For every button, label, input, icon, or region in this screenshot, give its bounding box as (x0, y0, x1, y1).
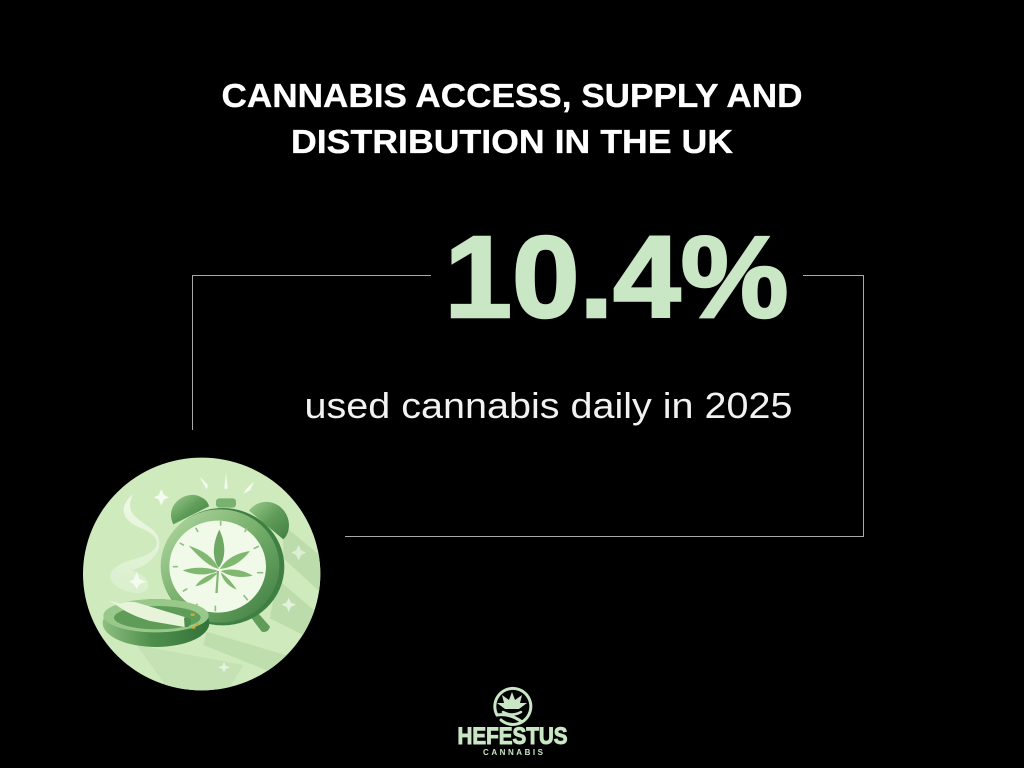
ashtray (103, 599, 209, 647)
shadow rays (137, 525, 323, 692)
sparkles (129, 472, 306, 673)
title: CANNABIS ACCESS, SUPPLY AND (222, 77, 802, 114)
clock ticks (173, 522, 263, 611)
frame around statistic (192, 276, 864, 536)
illustration: alarm clock and ashtray (83, 458, 323, 692)
clock face (169, 521, 266, 613)
top knob (216, 498, 236, 508)
ember (191, 613, 199, 629)
clock body (161, 508, 284, 625)
logo wordmark: HEFESTUS (458, 723, 568, 750)
smoke (110, 494, 159, 593)
logo subtitle: CANNABIS (483, 748, 544, 757)
statistic description: used cannabis daily in 2025 (304, 385, 792, 426)
left bell (171, 495, 209, 524)
right bell (249, 502, 289, 539)
logo: Hefestus Cannabis (458, 688, 568, 757)
logo icon (495, 688, 531, 724)
statistic: 10.4%: 10.4% (444, 212, 788, 342)
joint (109, 600, 187, 627)
title: DISTRIBUTION IN THE UK (291, 123, 733, 160)
title (222, 77, 802, 160)
clock foot (252, 613, 270, 632)
cannabis leaf on clock (183, 530, 253, 593)
background disc (83, 458, 320, 690)
